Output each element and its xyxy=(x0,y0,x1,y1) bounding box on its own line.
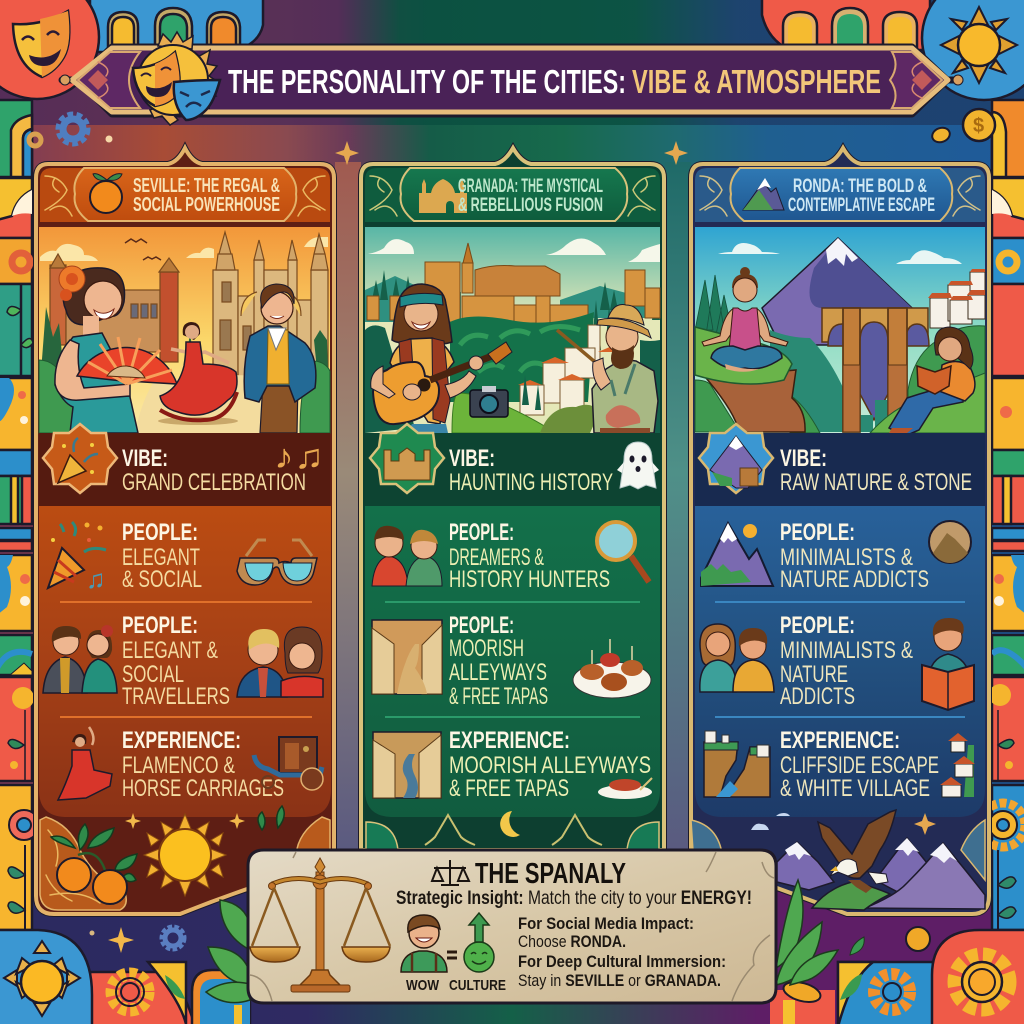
row: Granada people 2: ALLEYWAYS xyxy=(449,659,547,686)
illustration: Granada xyxy=(365,227,660,433)
icon: carriage xyxy=(254,737,323,790)
row: Granada people 1 xyxy=(372,519,649,593)
panel: Granada xyxy=(361,148,664,850)
divider: Ronda 1 xyxy=(715,601,965,603)
leaves xyxy=(206,900,250,1003)
camera xyxy=(470,386,508,417)
row: Granada people 2 xyxy=(372,612,651,710)
white village xyxy=(930,272,985,328)
text: recommendations xyxy=(518,914,726,990)
row: Seville people 2 xyxy=(43,612,323,710)
top right corner: sun xyxy=(762,0,1024,100)
row: Ronda vibe: VIBE: xyxy=(780,445,827,472)
row: Granada vibe: HAUNTING HISTORY xyxy=(449,469,613,496)
icon: party popper xyxy=(58,455,86,483)
row: Ronda people 2: MINIMALISTS & xyxy=(780,637,913,664)
icon: mountains with sun xyxy=(701,523,773,586)
row: Ronda experience: CLIFFSIDE ESCAPE xyxy=(780,752,939,779)
flamenco dancer xyxy=(160,322,237,420)
row: Ronda people 1: MINIMALISTS & xyxy=(780,544,913,571)
row: Granada experience xyxy=(373,727,652,802)
top arches left xyxy=(108,8,240,48)
title banner xyxy=(60,32,963,125)
icon: tapas plate xyxy=(573,639,651,698)
row: Ronda experience: EXPERIENCE: xyxy=(780,727,900,754)
row: Ronda lower area xyxy=(695,506,985,817)
illustration: Ronda xyxy=(695,227,985,436)
icon: large balance scales xyxy=(250,858,390,992)
row: Ronda people 2: PEOPLE: xyxy=(780,612,855,639)
header: Granada: & REBELLIOUS FUSION xyxy=(458,195,603,216)
divider: Granada 2 xyxy=(385,716,640,718)
row: Seville people 2: TRAVELLERS xyxy=(122,683,230,710)
row: Ronda vibe xyxy=(695,424,985,506)
icon: elegant couple xyxy=(43,625,117,693)
row: Ronda people 2: NATURE xyxy=(780,661,848,688)
coins and small decorations xyxy=(29,109,995,165)
icon: stone sphere xyxy=(929,521,971,563)
icon: flamenco dancer xyxy=(58,727,112,800)
icon: wow equals culture: CULTURE xyxy=(449,977,506,994)
row: Granada people 2: PEOPLE: xyxy=(449,612,514,639)
icon: mosque xyxy=(419,179,467,213)
decorative colourful border right xyxy=(981,100,1024,930)
row: Ronda people 1: PEOPLE: xyxy=(780,519,855,546)
header: Granada: GRANADA: THE MYSTICAL xyxy=(458,176,603,197)
woman with fan xyxy=(55,266,177,433)
bridge xyxy=(822,308,929,432)
row: Ronda experience xyxy=(704,727,975,802)
row: Seville lower area xyxy=(39,506,331,817)
bottom right corner: gear and leaves xyxy=(770,880,1024,1024)
row: Granada experience: & FREE TAPAS xyxy=(449,775,569,802)
header: Seville xyxy=(40,168,330,222)
icon: white houses xyxy=(940,733,975,797)
row: Granada experience: MOORISH ALLEYWAYS xyxy=(449,752,651,779)
row: Seville people 2: SOCIAL xyxy=(122,661,184,688)
header: Ronda xyxy=(695,168,985,222)
icon: fortress xyxy=(384,448,430,480)
granada footer: crescent and arabesques xyxy=(366,811,659,850)
icon: mountain xyxy=(710,436,762,488)
icon: cliffs with houses xyxy=(704,731,770,797)
row: Granada lower area xyxy=(365,506,660,817)
seville footer: oranges and sun xyxy=(40,806,330,910)
row: Granada experience: EXPERIENCE: xyxy=(449,727,570,754)
row: Seville people 1: PEOPLE: xyxy=(122,519,198,546)
row: Ronda people 2: ADDICTS xyxy=(780,683,855,710)
icon: couple in blue and red xyxy=(237,627,323,697)
row: Seville vibe: GRAND CELEBRATION xyxy=(122,469,306,496)
icon: eagle xyxy=(818,810,896,893)
reading woman xyxy=(889,327,975,436)
icon: moorish alley xyxy=(372,620,442,694)
row: Seville people 1 xyxy=(48,519,317,594)
icon: wow equals culture: WOW xyxy=(406,977,440,994)
illustration: Seville xyxy=(39,227,330,433)
row: Granada people 2: & FREE TAPAS xyxy=(449,683,548,710)
panel: Seville xyxy=(36,148,334,914)
row: Ronda experience: & WHITE VILLAGE xyxy=(780,775,930,802)
row: Ronda people 1 xyxy=(701,519,971,593)
heading: The Spanaly xyxy=(432,858,626,890)
man in blue suit xyxy=(244,284,316,433)
icon: alley with stream xyxy=(373,732,441,798)
painter xyxy=(557,305,658,433)
row: Seville people 2: ELEGANT & xyxy=(122,637,218,664)
icon: magnifying glass xyxy=(597,522,649,582)
row: Seville vibe: VIBE: xyxy=(122,445,168,472)
panel: Ronda xyxy=(691,148,989,914)
row: Ronda people 2 xyxy=(700,612,974,710)
row: Seville vibe xyxy=(39,424,330,506)
text: recommendations: Stay in SEVILLE or GRANADA. xyxy=(518,971,721,990)
bottom left corner: sun and gear xyxy=(0,900,250,1024)
row: Granada vibe: VIBE: xyxy=(449,445,495,472)
row: Seville people 2: PEOPLE: xyxy=(122,612,198,639)
row: Granada people 1: DREAMERS & xyxy=(449,544,544,571)
header: Seville: SOCIAL POWERHOUSE xyxy=(133,194,280,216)
icon: orange xyxy=(90,174,122,213)
row: Granada vibe xyxy=(365,424,660,506)
divider: Seville 2 xyxy=(60,716,312,718)
row: Granada people 2: MOORISH xyxy=(449,635,524,662)
icon: two travellers xyxy=(372,526,442,586)
row: Seville experience: EXPERIENCE: xyxy=(122,727,241,754)
text: recommendations: Choose RONDA. xyxy=(518,932,626,951)
cliff xyxy=(695,327,820,433)
coins and small decorations: $ xyxy=(973,115,984,137)
divider: Granada 1 xyxy=(385,601,640,603)
divider: Ronda 2 xyxy=(715,716,965,718)
meditating person xyxy=(702,267,788,372)
icon: party popper with note xyxy=(48,522,106,594)
icon: mountains xyxy=(743,178,784,210)
icon: person reading xyxy=(922,618,974,710)
row: Granada people 1: PEOPLE: xyxy=(449,519,514,546)
icon: ghost xyxy=(617,442,659,489)
header: Ronda: RONDA: THE BOLD & xyxy=(793,176,927,197)
top left corner: happy mask xyxy=(0,0,263,99)
icon: theatre masks on sun xyxy=(133,32,220,125)
header: Seville: SEVILLE: THE REGAL & xyxy=(133,175,280,197)
heading: The Spanaly: THE SPANALY xyxy=(475,858,626,890)
icon: wow equals culture xyxy=(401,913,506,994)
text: strategic insight: Strategic Insight: Match the city to your ENERGY! xyxy=(396,888,752,909)
text: recommendations: For Social Media Impact: xyxy=(518,914,694,933)
icon: party popper with note: ♫ xyxy=(86,564,106,594)
icon: small tapas dish xyxy=(598,778,652,799)
row: Seville people 1: ELEGANT xyxy=(122,544,200,571)
text: recommendations: For Deep Cultural Immersion: xyxy=(518,952,726,971)
row: Seville experience: FLAMENCO & xyxy=(122,752,235,779)
header: Granada xyxy=(365,168,660,222)
row: Seville experience: HORSE CARRIAGES xyxy=(122,775,284,802)
icon: couple xyxy=(700,624,774,692)
row: Granada people 1: HISTORY HUNTERS xyxy=(449,566,610,593)
divider: Seville 1 xyxy=(60,601,312,603)
row: Seville experience xyxy=(58,727,323,802)
title banner: VIBE & ATMOSPHERE xyxy=(632,63,881,100)
ronda footer: mountains and eagle xyxy=(691,810,985,910)
row: Ronda people 1: NATURE ADDICTS xyxy=(780,566,929,593)
icon: sunglasses xyxy=(237,540,317,585)
row: Seville people 1: & SOCIAL xyxy=(122,566,202,593)
icon: music notes: ♪♫ xyxy=(274,438,324,476)
card: The Spanaly xyxy=(248,850,776,1003)
decorative colourful border left xyxy=(0,100,39,930)
heading text: THE PERSONALITY OF THE CITIES: xyxy=(228,63,626,100)
musician with guitar xyxy=(371,284,512,433)
